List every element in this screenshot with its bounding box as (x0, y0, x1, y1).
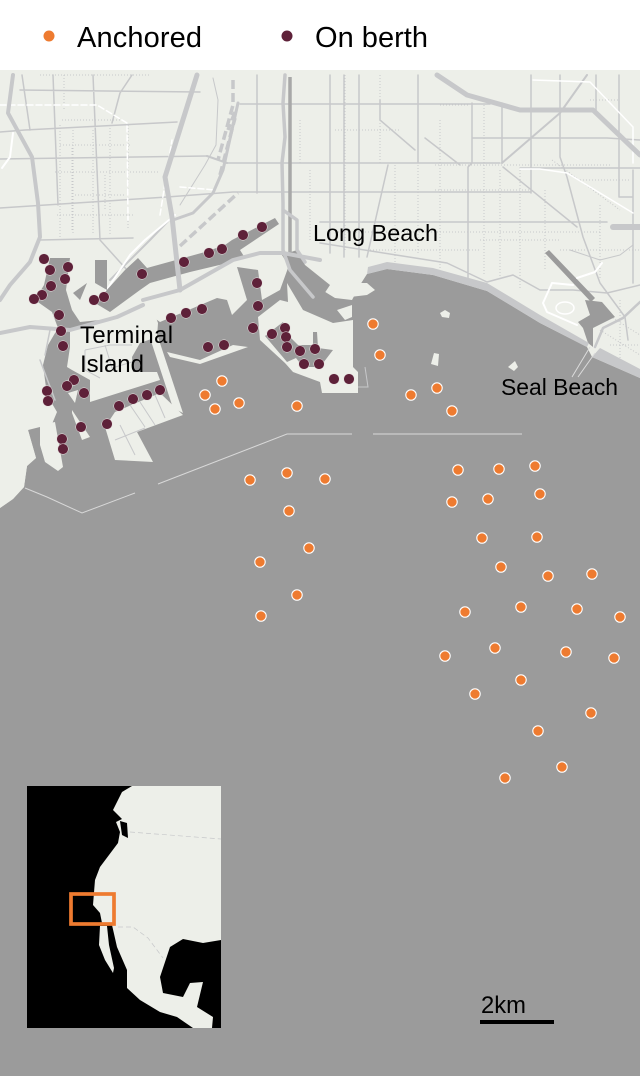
label: Long Beach: Long Beach (313, 220, 438, 246)
beach (367, 262, 640, 378)
jetties (572, 347, 595, 377)
pier and island details (85, 345, 368, 455)
channels and basins (73, 218, 615, 347)
roads: white lines (0, 80, 633, 300)
land base (0, 70, 640, 520)
marina white road (543, 263, 602, 325)
pier basin (265, 322, 333, 367)
label: Terminal Island (80, 322, 173, 378)
breakwater (25, 434, 522, 513)
scale bar: 2km (481, 992, 526, 1019)
inset locator rectangle (71, 894, 114, 924)
river (288, 77, 292, 253)
marina ring (556, 302, 574, 314)
legend: On berth (315, 22, 428, 54)
rail corridor (180, 80, 238, 246)
roads: major (0, 75, 640, 400)
label: Terminal Island: Island (80, 351, 144, 378)
inset locator map (27, 786, 221, 1028)
ships on berth (29, 222, 354, 454)
anchored ships (200, 319, 625, 783)
label: Terminal Island: Terminal (80, 322, 173, 349)
legend: Anchored (77, 22, 202, 54)
label: Seal Beach: Seal Beach (501, 374, 618, 400)
roads: minor (0, 75, 640, 340)
legend (0, 0, 640, 70)
sea (0, 258, 640, 1076)
terminal island land (0, 283, 518, 508)
minor street grid (0, 75, 640, 500)
scale bar (480, 992, 554, 1024)
